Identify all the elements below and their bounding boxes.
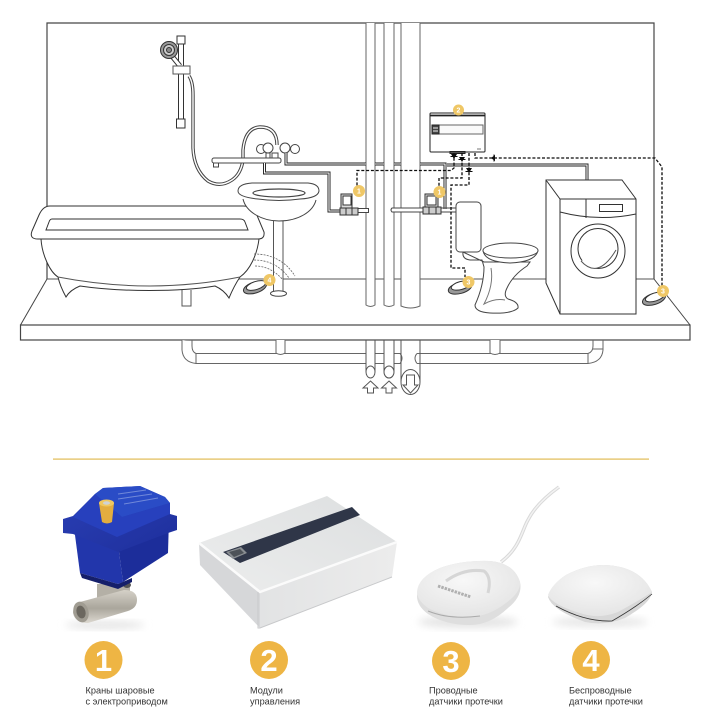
- plumbing scheme illustration: [20, 23, 690, 394]
- gold divider: [53, 458, 649, 460]
- caption 2: Модули: [250, 686, 283, 696]
- caption 1: Краны шаровые: [86, 686, 155, 696]
- caption 4: датчики протечки: [569, 696, 643, 706]
- caption 3: датчики протечки: [429, 696, 503, 706]
- marker 3 washing machine: 3: [661, 288, 665, 296]
- wired sensor by washing machine: [641, 290, 667, 308]
- bathtub: [31, 206, 264, 306]
- control module: [430, 113, 485, 154]
- shower set: [160, 36, 277, 184]
- blue actuator housing: [63, 486, 177, 589]
- badge 1: 1: [95, 643, 112, 678]
- ball valve left: [340, 194, 358, 215]
- marker 1 left: [353, 185, 365, 197]
- sensor wiring dashed lines: [357, 153, 662, 287]
- brass ball valve body: [71, 582, 137, 624]
- marker 1 right: 1: [438, 190, 442, 196]
- marker 4: 4: [268, 278, 272, 284]
- room walls and floor: [20, 23, 690, 340]
- riser pipes: [366, 23, 420, 308]
- caption 2: управления: [250, 696, 300, 706]
- dark control panel band: [223, 507, 360, 563]
- wired sensor by toilet: [447, 279, 473, 296]
- marker 3 toilet: [462, 276, 474, 288]
- marker 4: [264, 274, 276, 286]
- marker 3 toilet: 3: [467, 280, 471, 286]
- caption 1: с электроприводом: [86, 696, 168, 706]
- wireless sensor signal waves: [254, 254, 295, 280]
- supply and drain pipe ends with flow arrows: [363, 340, 420, 394]
- drain pipes under the floor: [182, 340, 603, 364]
- marker 1 right: [434, 186, 446, 198]
- cold and hot supply lines: [264, 153, 587, 211]
- ball valve right: [423, 194, 441, 214]
- yellow valve stem: [99, 500, 114, 524]
- pipes to valves: [358, 208, 457, 212]
- item 4 label: [569, 641, 643, 706]
- marker 2: [453, 104, 464, 116]
- item 1 label: [84, 641, 168, 706]
- bath mixer tap: [212, 143, 300, 167]
- scheme number markers: [264, 104, 669, 297]
- badge 4: 4: [582, 643, 600, 678]
- marker 2: 2: [457, 108, 461, 114]
- wireless sensor in the bathroom: [242, 279, 268, 296]
- product: control module: [199, 496, 397, 628]
- product: motorised ball valve: [63, 486, 177, 629]
- product: wireless leak sensor: [548, 565, 652, 627]
- product: wired leak sensor: [417, 487, 559, 628]
- wiring direction arrow marks: [450, 154, 495, 173]
- marker 3 washing machine: [657, 285, 669, 297]
- badge 3: 3: [442, 644, 460, 679]
- item 2 label: [250, 641, 300, 706]
- washing machine: [546, 180, 636, 314]
- badge 2: 2: [260, 643, 278, 678]
- item 3 label: [429, 642, 503, 706]
- wash basin with pedestal: [238, 183, 319, 296]
- toilet: [456, 202, 538, 313]
- marker 1 left: 1: [357, 188, 361, 196]
- caption 3: Проводные: [429, 686, 478, 696]
- caption 4: Беспроводные: [569, 686, 632, 696]
